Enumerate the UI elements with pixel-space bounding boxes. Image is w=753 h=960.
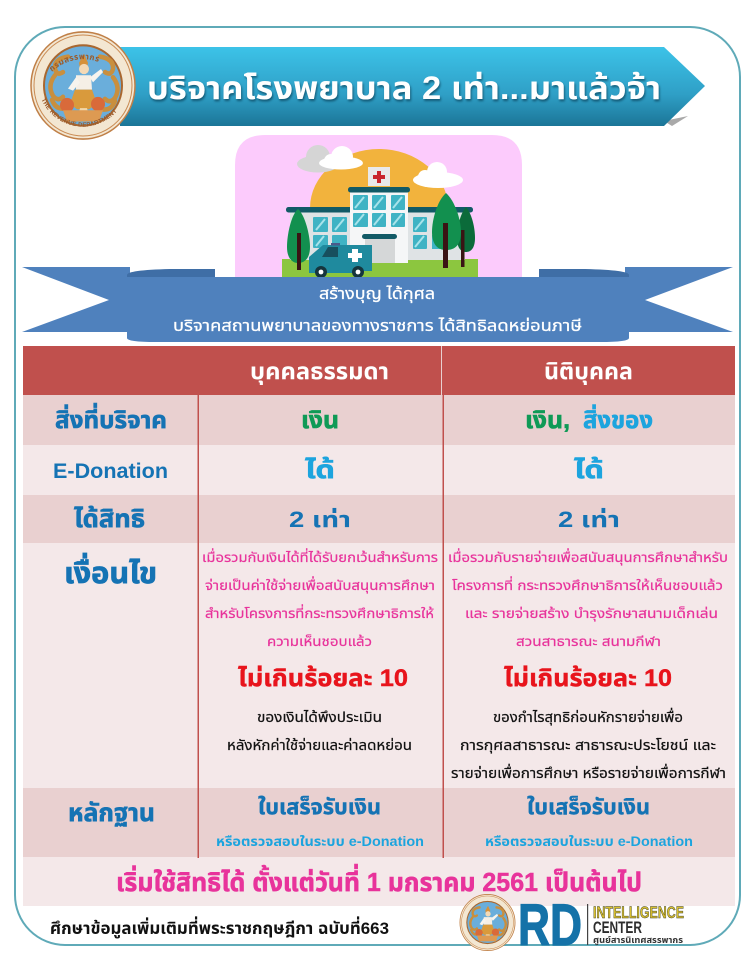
ribbon subheading: บริจาคสถานพยาบาลของทางราชการ ได้สิทธิลดหย่อนภาษี bbox=[173, 317, 582, 335]
table row backgrounds bbox=[23, 395, 735, 906]
row: conditions: เงื่อนไข bbox=[64, 552, 157, 590]
row: evidence: หรือตรวจสอบในระบบ e-Donation bbox=[216, 834, 424, 849]
conditions: individuals: ไม่เกินร้อยละ 10 bbox=[238, 664, 408, 692]
row: evidence: ใบเสร็จรับเงิน bbox=[258, 796, 381, 819]
conditions: juristic persons: ของกำไรสุทธิก่อนหักรายจ่ายเพื่อ bbox=[493, 707, 683, 726]
row: e-donation: E-Donation bbox=[53, 460, 168, 483]
effective date: เริ่มใช้สิทธิได้ ตั้งแต่วันที่ 1 มกราคม 2561 เป็นต้นไป bbox=[116, 864, 642, 897]
wings bbox=[290, 210, 465, 260]
conditions: individuals: ความเห็นชอบแล้ว bbox=[267, 634, 372, 649]
window highlights bbox=[316, 197, 424, 247]
illustration: hospital on pink panel bbox=[235, 135, 522, 280]
table header bbox=[23, 346, 735, 395]
tower windows bbox=[353, 195, 405, 227]
sun bbox=[310, 149, 448, 208]
ambulance bbox=[309, 245, 372, 273]
conditions: juristic persons bbox=[448, 548, 728, 781]
row: e-donation: ได้ bbox=[574, 456, 604, 484]
icon: revenue department seal: กรมสรรพากร bbox=[50, 54, 100, 72]
table header: นิติบุคคล bbox=[544, 358, 633, 385]
hospital sign with red cross bbox=[368, 167, 390, 186]
conditions: individuals: สำหรับโครงการที่กระทรวงศึกษาธิการให้ bbox=[205, 604, 434, 621]
conditions: juristic persons: และ รายจ่ายสร้าง บำรุงรักษาสนามเด็กเล่น bbox=[465, 605, 718, 622]
conditions: individuals: เมื่อรวมกับเงินได้ที่ได้รับยกเว้นสำหรับการ bbox=[202, 548, 438, 565]
row: entitlement: 2 เท่า bbox=[289, 507, 351, 532]
row: donated items bbox=[55, 403, 653, 434]
row: conditions bbox=[64, 548, 728, 781]
footer logo: RD Intelligence Center: ศูนย์สารนิเทศสรรพากร bbox=[593, 935, 683, 945]
central tower bbox=[350, 190, 408, 263]
icon: revenue department seal: THE REVENUE DEPARTMENT bbox=[42, 98, 116, 127]
comparison table bbox=[23, 346, 735, 906]
row: donated items: สิ่งของ bbox=[583, 404, 653, 434]
row: donated items: เงิน bbox=[301, 407, 339, 434]
footer logo: RD Intelligence Center: INTELLIGENCE bbox=[593, 903, 684, 922]
green lawn bbox=[282, 259, 478, 277]
row: donated items: สิ่งที่บริจาค bbox=[55, 403, 167, 434]
footer logo: RD Intelligence Center: CENTER bbox=[593, 918, 642, 937]
row: evidence: ใบเสร็จรับเงิน bbox=[527, 796, 650, 819]
clouds bbox=[297, 145, 339, 172]
row: entitlement: 2 เท่า bbox=[558, 507, 620, 532]
title banner bbox=[120, 47, 705, 126]
entrance door bbox=[365, 239, 395, 263]
title text: บริจาคโรงพยาบาล 2 เท่า...มาแล้วจ้า bbox=[147, 70, 661, 106]
conditions: individuals: หลังหักค่าใช้จ่ายและค่าลดหย่อน bbox=[227, 737, 412, 753]
conditions: individuals: ของเงินได้พึงประเมิน bbox=[257, 709, 382, 725]
wing windows bbox=[313, 217, 440, 249]
ribbon banner bbox=[22, 267, 733, 342]
row: e-donation bbox=[53, 456, 604, 484]
row: donated items: เงิน, bbox=[525, 407, 570, 434]
trees bbox=[457, 207, 475, 252]
conditions: juristic persons: ไม่เกินร้อยละ 10 bbox=[504, 664, 672, 692]
icon: revenue department seal bbox=[30, 31, 136, 140]
conditions: juristic persons: รายจ่ายเพื่อการศึกษา หรือรายจ่ายเพื่อการกีฬา bbox=[451, 763, 726, 781]
table header: บุคคลธรรมดา bbox=[250, 358, 389, 385]
footer logo: seal bbox=[460, 894, 515, 951]
footer note: ศึกษาข้อมูลเพิ่มเติมที่พระราชกฤษฎีกา ฉบับที่663 bbox=[50, 916, 389, 939]
row: entitlement bbox=[74, 505, 620, 533]
row: evidence bbox=[68, 796, 693, 849]
footer logo: RD Intelligence Center: RD bbox=[518, 893, 582, 958]
row: evidence: หรือตรวจสอบในระบบ e-Donation bbox=[485, 834, 693, 849]
conditions: individuals bbox=[202, 548, 438, 753]
row: e-donation: ได้ bbox=[305, 456, 335, 484]
conditions: juristic persons: สวนสาธารณะ สนามกีฬา bbox=[516, 634, 661, 649]
footer logo: RD Intelligence Center bbox=[518, 893, 684, 958]
conditions: juristic persons: การกุศลสาธารณะ สาธารณะประโยชน์ และ bbox=[460, 737, 716, 754]
ribbon heading: สร้างบุญ ได้กุศล bbox=[319, 286, 435, 303]
conditions: juristic persons: เมื่อรวมกับรายจ่ายเพื่อสนับสนุนการศึกษาสำหรับ bbox=[448, 548, 728, 566]
conditions: individuals: จ่ายเป็นค่าใช้จ่ายเพื่อสนับสนุนการศึกษา bbox=[205, 576, 435, 594]
row: evidence: หลักฐาน bbox=[68, 799, 155, 827]
conditions: juristic persons: โครงการที่ กระทรวงศึกษาธิการให้เห็นชอบแล้ว bbox=[452, 576, 723, 593]
row: entitlement: ได้สิทธิ bbox=[74, 505, 145, 533]
